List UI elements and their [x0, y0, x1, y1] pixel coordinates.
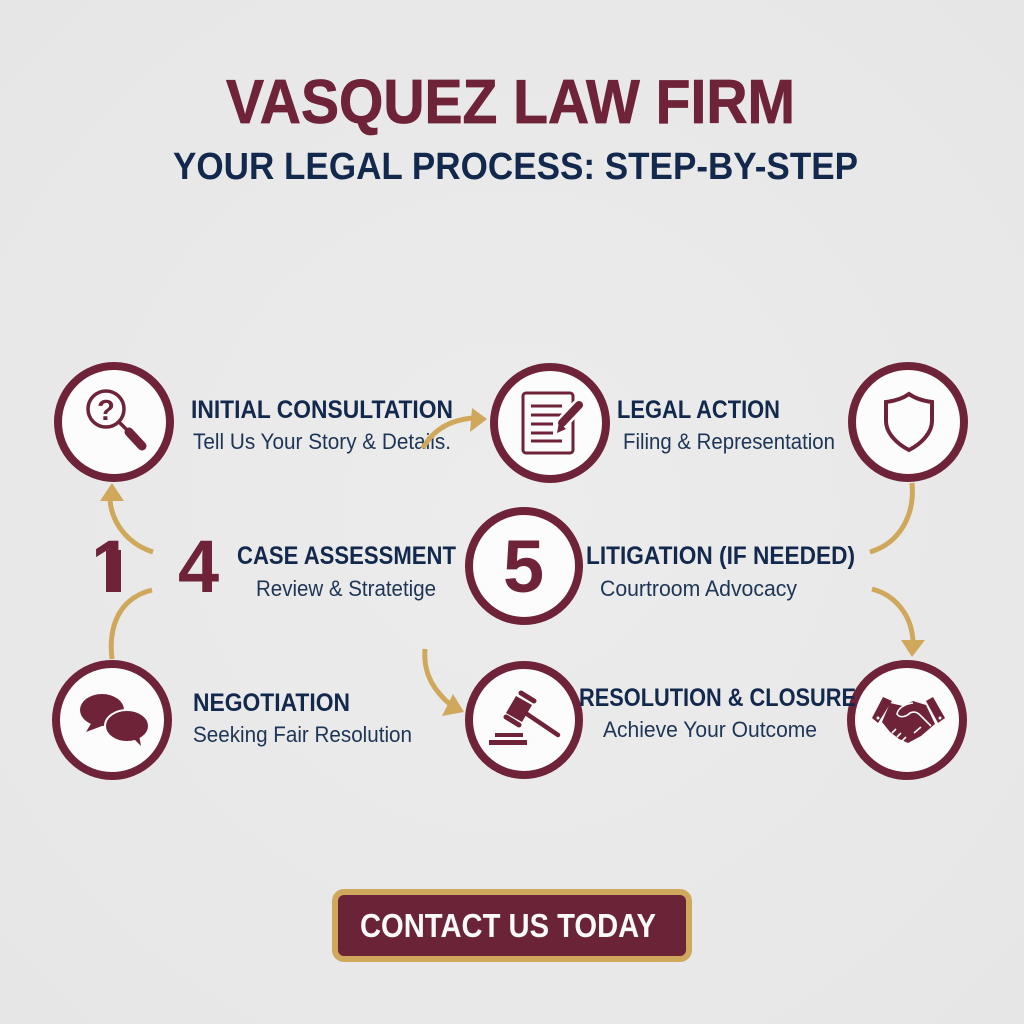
- step: litigation text: Courtroom Advocacy: [600, 576, 797, 601]
- arrow: consultation to legal action: [423, 408, 487, 448]
- number 5 circle: 5: [503, 525, 544, 608]
- arrow: number 1 to consultation: [100, 483, 153, 552]
- step: resolution text: Achieve Your Outcome: [603, 717, 817, 742]
- subtitle: YOUR LEGAL PROCESS: STEP-BY-STEP: [173, 146, 858, 188]
- step: negotiation text: Seeking Fair Resolution: [193, 722, 412, 747]
- icon: magnifier with question mark: [58, 366, 170, 478]
- step: initial consultation text: [191, 396, 453, 454]
- step: legal action text: Filing & Representation: [623, 429, 835, 454]
- icon: gavel: [469, 665, 579, 775]
- icon: handshake: [851, 664, 963, 776]
- step: resolution text: RESOLUTION & CLOSURE: [579, 684, 856, 712]
- step: legal action text: [617, 396, 835, 454]
- number 1: [96, 540, 121, 592]
- arrow: shield to litigation: [870, 483, 912, 552]
- step: case assessment text: [237, 542, 456, 601]
- title: VASQUEZ LAW FIRM: [226, 68, 795, 137]
- icon: magnifier with question mark: ?: [97, 395, 115, 427]
- icon: speech bubbles: [56, 664, 168, 776]
- arrow: assessment to gavel: [425, 649, 464, 716]
- step: initial consultation text: Tell Us Your Story & Details.: [193, 429, 451, 454]
- arrow: negotiation to number 4: [111, 590, 152, 659]
- number 4: 4: [178, 525, 219, 608]
- icon: document with pencil: [494, 367, 606, 479]
- button: contact us today: CONTACT US TODAY: [360, 907, 656, 944]
- step: negotiation text: [193, 689, 412, 747]
- step: legal action text: LEGAL ACTION: [617, 396, 780, 424]
- icon: shield: [852, 366, 964, 478]
- step: resolution text: [579, 684, 856, 742]
- number 5 circle: [469, 511, 579, 621]
- button: contact us today: [332, 889, 692, 962]
- step: litigation text: [586, 542, 855, 601]
- step: initial consultation text: INITIAL CONSULTATION: [191, 396, 453, 424]
- number 1: 1: [91, 525, 132, 608]
- step: case assessment text: CASE ASSESSMENT: [237, 542, 456, 570]
- step: litigation text: LITIGATION (IF NEEDED): [586, 542, 855, 570]
- step: case assessment text: Review & Stratetige: [256, 576, 436, 601]
- step: negotiation text: NEGOTIATION: [193, 689, 350, 717]
- arrow: litigation to handshake: [872, 589, 925, 657]
